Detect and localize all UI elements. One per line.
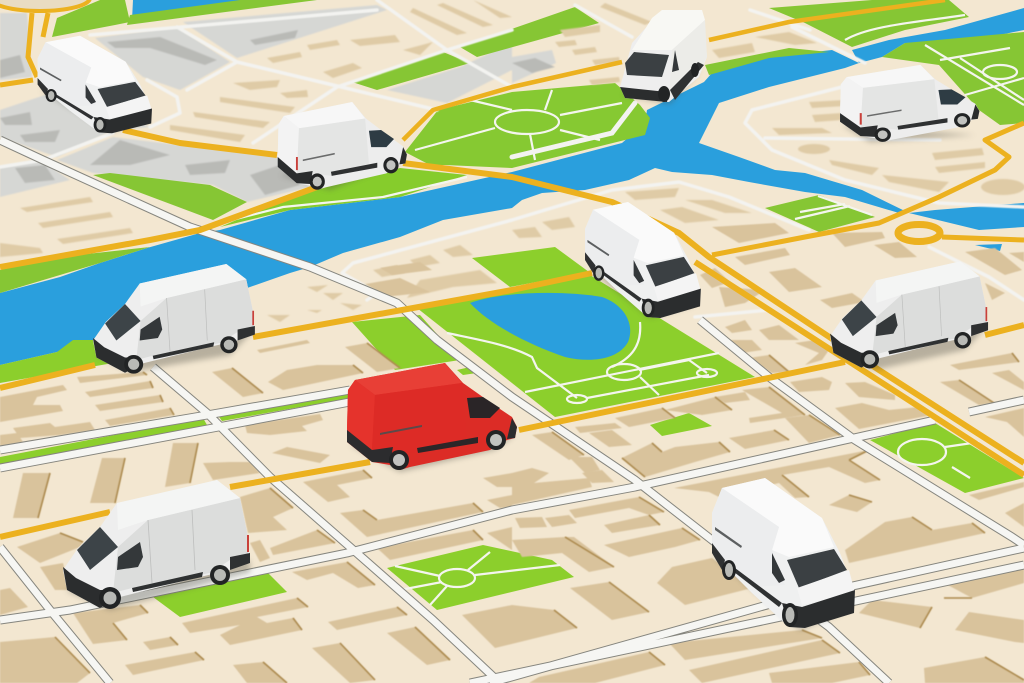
van: red delivery van bbox=[347, 363, 517, 470]
park road bbox=[512, 103, 635, 157]
lake in park bbox=[470, 293, 630, 360]
water: small pond bbox=[975, 244, 1002, 251]
water: upper right channel bbox=[852, 8, 1024, 63]
water: river bbox=[0, 50, 1024, 365]
van: bottom left bbox=[63, 480, 250, 609]
van: centre bbox=[585, 202, 701, 318]
highway roundabout bbox=[898, 224, 940, 242]
park paths bbox=[220, 15, 1024, 605]
van: top right bbox=[840, 65, 979, 142]
water: upper left bbox=[132, 0, 253, 20]
streets far bbox=[0, 0, 1024, 317]
van: top middle right bbox=[620, 10, 707, 102]
van: right middle bbox=[830, 261, 988, 368]
far building blocks bbox=[0, 0, 1024, 322]
streets near outlines bbox=[0, 140, 1024, 683]
building shadow edges bbox=[38, 340, 1024, 683]
van: top centre bbox=[278, 102, 407, 190]
yellow highways bbox=[0, 0, 1024, 537]
van: bottom right bbox=[712, 478, 855, 628]
van: top left bbox=[38, 36, 152, 133]
near building blocks bbox=[0, 223, 1024, 683]
grey district bbox=[0, 5, 556, 202]
streets near white bbox=[0, 140, 1024, 683]
van: left middle bbox=[93, 264, 255, 374]
van shadows bbox=[40, 70, 985, 630]
top left roundabout bbox=[0, 0, 90, 11]
